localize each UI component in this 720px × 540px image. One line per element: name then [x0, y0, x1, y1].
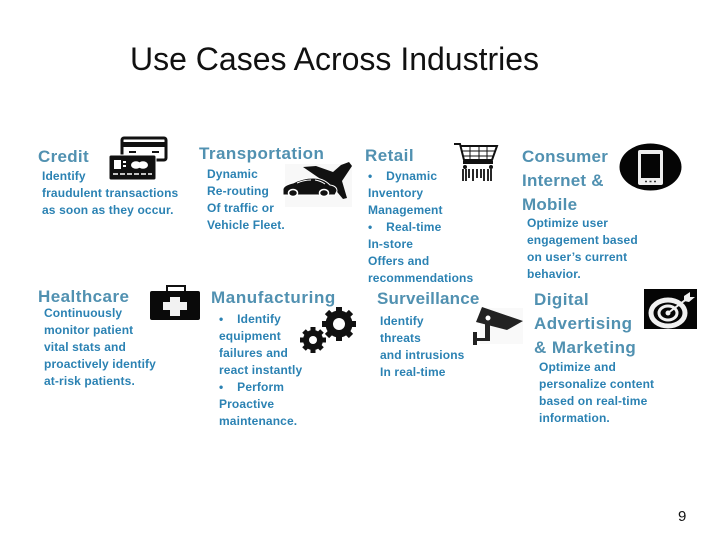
- text: healthcare: [44, 306, 156, 388]
- text: manufacturing: react instantly: [219, 363, 302, 377]
- text: transportation: Dynamic: [207, 167, 258, 181]
- icon: target with arrow: [644, 289, 697, 329]
- text: consumer internet and mobile: on user’s current: [527, 250, 627, 264]
- text: retail: Inventory: [368, 186, 423, 200]
- heading: digital advertising and marketing: [534, 290, 636, 357]
- text: digital advertising and marketing: based on real-time: [539, 394, 647, 408]
- icon: shopping cart: [454, 143, 498, 181]
- text: healthcare: vital stats and: [44, 340, 126, 354]
- text: consumer internet and mobile: [527, 216, 638, 281]
- heading: transportation: Transportation: [199, 144, 324, 163]
- text: surveillance: Identify: [380, 314, 424, 328]
- text: manufacturing: equipment: [219, 329, 281, 343]
- text: manufacturing: maintenance.: [219, 414, 297, 428]
- text: credit: as soon as they occur.: [42, 203, 174, 217]
- text: transportation: Re-routing: [207, 184, 269, 198]
- title: Use Cases Across Industries: [130, 41, 539, 77]
- text: digital advertising and marketing: Optimize and: [539, 360, 616, 374]
- text: healthcare: Continuously: [44, 306, 122, 320]
- heading: healthcare: Healthcare: [38, 287, 129, 306]
- text: manufacturing: [219, 312, 302, 428]
- heading: manufacturing: Manufacturing: [211, 288, 336, 307]
- text: surveillance: [380, 314, 464, 379]
- text: manufacturing: failures and: [219, 346, 288, 360]
- text: retail: [368, 169, 473, 285]
- icon: plane and car: [284, 162, 352, 199]
- text: surveillance: In real-time: [380, 365, 446, 379]
- icon: gears: [300, 307, 356, 353]
- text: transportation: Vehicle Fleet.: [207, 218, 285, 232]
- text: consumer internet and mobile: Optimize user: [527, 216, 608, 230]
- icon: security camera: [473, 307, 523, 345]
- text: retail: • Dynamic: [368, 169, 437, 183]
- text: transportation: [207, 167, 285, 232]
- text: surveillance: threats: [380, 331, 421, 345]
- heading: consumer internet and mobile: Internet &: [522, 171, 604, 190]
- text: credit: Identify: [42, 169, 86, 183]
- text: digital advertising and marketing: [539, 360, 654, 425]
- heading: surveillance: Surveillance: [377, 289, 480, 308]
- text: retail: • Real-time: [368, 220, 441, 234]
- text: manufacturing: Proactive: [219, 397, 274, 411]
- text: credit: fraudulent transactions: [42, 186, 178, 200]
- text: credit: [42, 169, 178, 217]
- text: healthcare: monitor patient: [44, 323, 133, 337]
- text: digital advertising and marketing: personalize content: [539, 377, 654, 391]
- page number: 9: [678, 508, 686, 525]
- heading: consumer internet and mobile: Consumer: [522, 147, 608, 166]
- text: digital advertising and marketing: information.: [539, 411, 610, 425]
- text: consumer internet and mobile: engagement based: [527, 233, 638, 247]
- text: healthcare: proactively identify: [44, 357, 156, 371]
- text: surveillance: and intrusions: [380, 348, 464, 362]
- heading: digital advertising and marketing: Advertising: [534, 314, 632, 333]
- heading: consumer internet and mobile: [522, 147, 608, 214]
- text: retail: recommendations: [368, 271, 473, 285]
- text: consumer internet and mobile: behavior.: [527, 267, 581, 281]
- icon: tablet: [620, 144, 682, 190]
- text: retail: Offers and: [368, 254, 429, 268]
- heading: retail: Retail: [365, 146, 414, 165]
- text: retail: In-store: [368, 237, 413, 251]
- heading: consumer internet and mobile: Mobile: [522, 195, 577, 214]
- icon: credit cards: [110, 136, 168, 180]
- text: transportation: Of traffic or: [207, 201, 274, 215]
- heading: digital advertising and marketing: Digital: [534, 290, 589, 309]
- icon: medical kit: [150, 285, 200, 320]
- text: manufacturing: • Identify: [219, 312, 281, 326]
- text: healthcare: at-risk patients.: [44, 374, 135, 388]
- heading: digital advertising and marketing: & Marketing: [534, 338, 636, 357]
- text: retail: Management: [368, 203, 443, 217]
- text: manufacturing: • Perform: [219, 380, 284, 394]
- heading: credit: Credit: [38, 147, 89, 166]
